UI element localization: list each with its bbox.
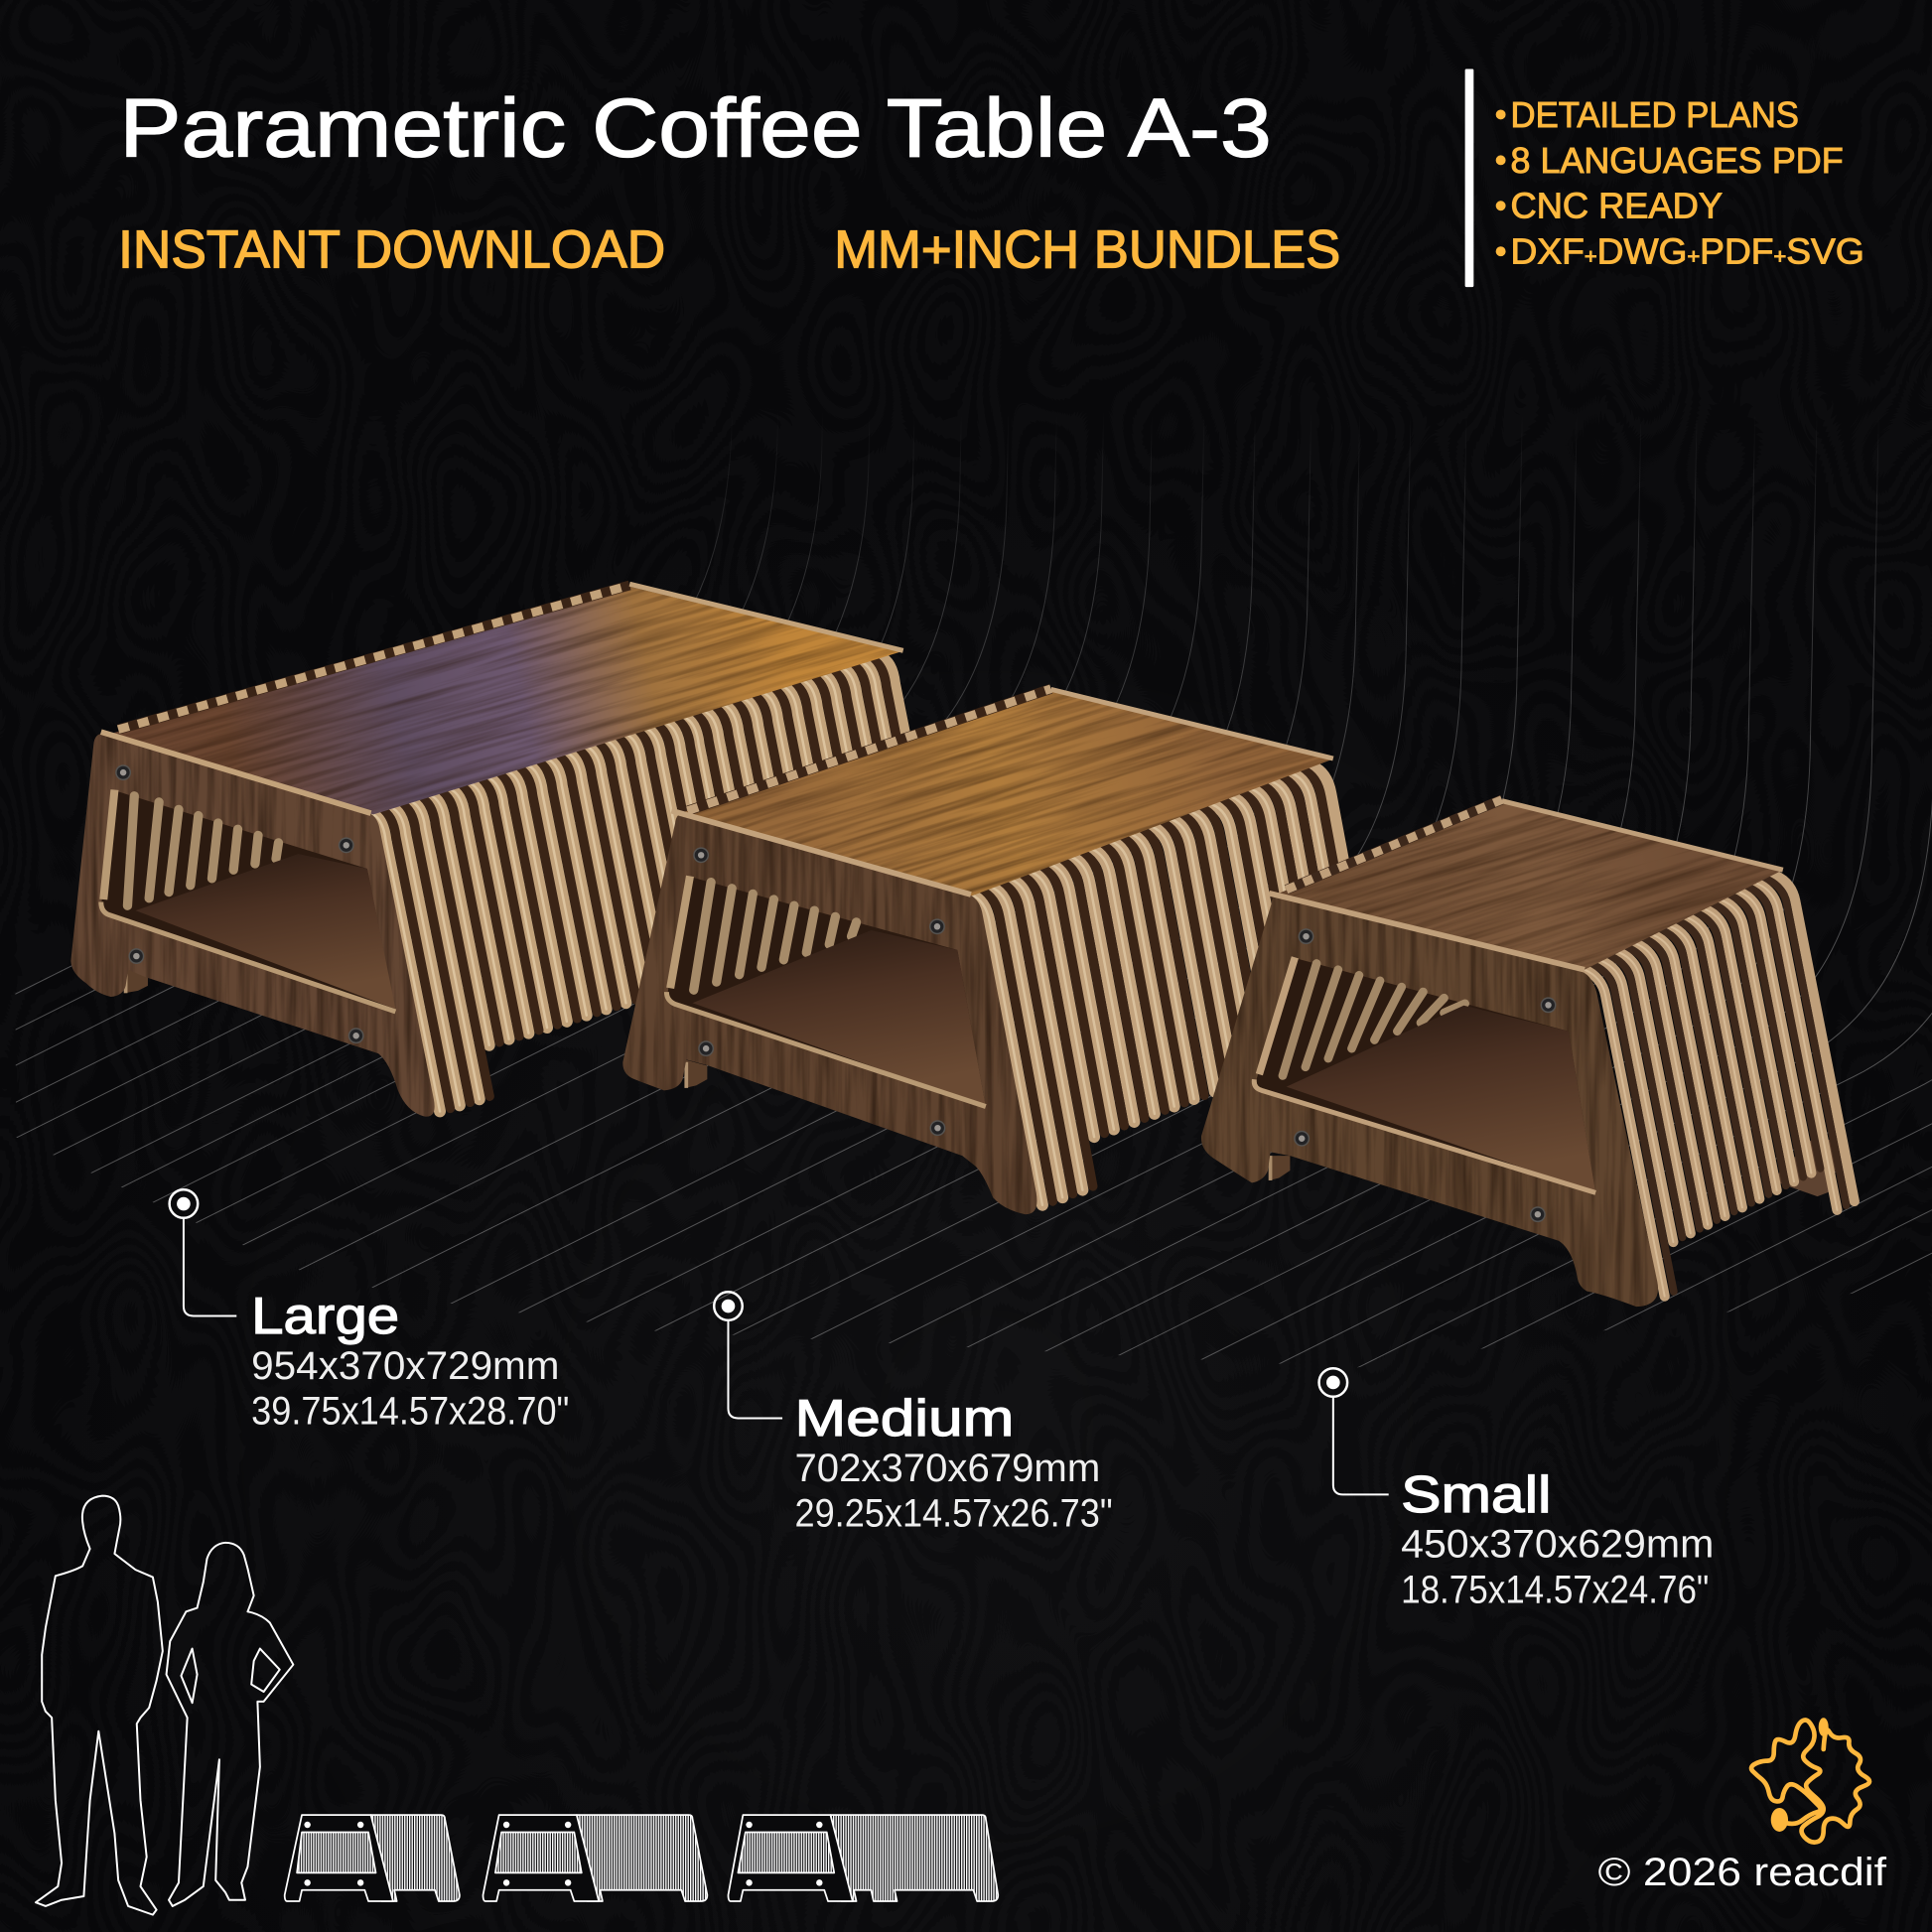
front plate: medium (622, 813, 1036, 1214)
bolts: medium (694, 848, 945, 1135)
callout: large (170, 1189, 569, 1434)
callout: small (1319, 1368, 1714, 1612)
icon: small table elevation (285, 1815, 460, 1901)
table top: large (113, 580, 903, 814)
dimensions: small: 450x370x629mm (1401, 1523, 1714, 1567)
dimensions: large (251, 1344, 569, 1434)
dimensions: small (1401, 1523, 1714, 1612)
icon: woman outline (167, 1543, 293, 1906)
bolts: large (116, 765, 363, 1042)
front plate edge: small (1269, 894, 1585, 970)
far foot plate: small table (1772, 1140, 1839, 1196)
title: Parametric Coffee Table A-3 (119, 82, 1272, 175)
callout pin and leader: small (1319, 1368, 1389, 1494)
window interior: medium (666, 876, 986, 1106)
slats: small table (1585, 875, 1855, 1297)
feature list (1496, 94, 1864, 272)
medium table (622, 684, 1349, 1215)
front plate edge: large (101, 732, 371, 813)
feature list: CNC READY (1511, 186, 1723, 226)
callout pin and leader: medium (714, 1292, 782, 1418)
label heading: medium: Medium (794, 1390, 1014, 1448)
front plate: large (70, 734, 435, 1117)
front plate: small (1201, 895, 1658, 1307)
slats: large table (371, 656, 949, 1111)
icon: reacdif logo (1751, 1718, 1869, 1843)
back foot: large (124, 967, 148, 993)
label heading: large: Large (251, 1288, 399, 1345)
dimensions: small: 18.75x14.57x24.76" (1401, 1569, 1709, 1612)
icon: man outline (36, 1496, 163, 1915)
window interior: small (1254, 957, 1595, 1192)
bolts: small (1295, 929, 1556, 1221)
table top: medium (685, 684, 1334, 896)
slats: medium table (971, 766, 1384, 1205)
subtitle: instant download: INSTANT DOWNLOAD (118, 220, 665, 279)
label heading: small: Small (1401, 1466, 1552, 1524)
feature list: 8 LANGUAGES PDF (1511, 140, 1844, 181)
vertical divider bar (1465, 69, 1473, 287)
back foot: small (1269, 1156, 1290, 1180)
dimensions: large: 954x370x729mm (251, 1344, 559, 1388)
icon: medium table elevation (483, 1815, 707, 1901)
back foot: medium (685, 1059, 707, 1088)
dimensions: medium: 29.25x14.57x26.73" (794, 1492, 1113, 1536)
window interior: large (101, 790, 395, 1012)
front plate edge: medium (671, 811, 971, 895)
human silhouettes for scale (36, 1496, 293, 1915)
subtitle: mm and inch bundles: MM+INCH BUNDLES (834, 220, 1340, 279)
dimensions: medium (794, 1447, 1113, 1536)
dimensions: large: 39.75x14.57x28.70" (251, 1390, 569, 1434)
callout pin and leader: large (170, 1189, 236, 1315)
icon: large table elevation (728, 1815, 998, 1901)
copyright: © 2026 reacdif (1598, 1851, 1887, 1894)
large table (70, 580, 910, 1118)
small table (1201, 795, 1860, 1307)
feature list: DXF+DWG+PDF+SVG (1511, 231, 1864, 272)
table top: small (1280, 795, 1783, 970)
callout: medium (714, 1292, 1113, 1536)
dimensions: medium: 702x370x679mm (794, 1447, 1100, 1490)
feature list: DETAILED PLANS (1511, 94, 1799, 135)
floor and wall perspective lines (15, 447, 1932, 1368)
